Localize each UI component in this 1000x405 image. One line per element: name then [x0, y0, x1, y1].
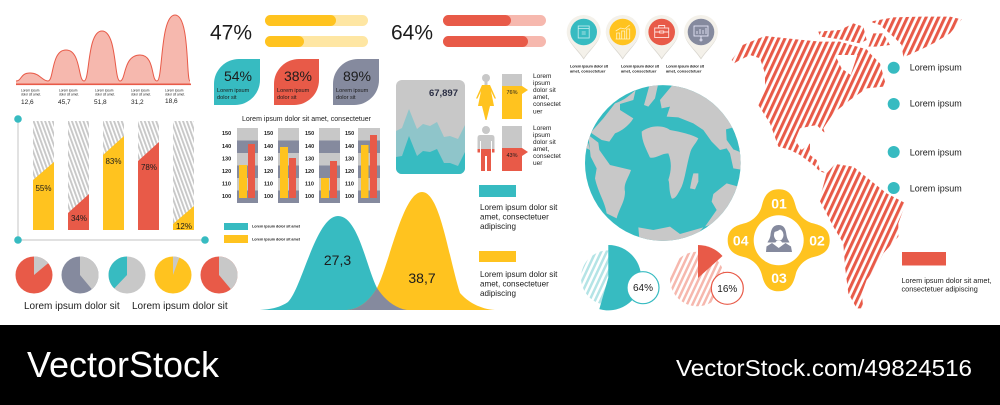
- area chart: Lorem ipsum: [95, 88, 114, 92]
- area chart: 31,2: [131, 99, 144, 106]
- bell legend yellow: adipiscing: [480, 289, 516, 298]
- grouped striped bar charts: 150: [345, 131, 354, 137]
- grouped striped bar charts: 130: [305, 156, 314, 162]
- gauge text lower: uer: [533, 160, 543, 167]
- map legend list: Lorem ipsum: [910, 98, 962, 108]
- black footer band: VectorStock: [27, 344, 220, 385]
- pin captions: Lorem ipsum dolor sit: [570, 64, 609, 68]
- grouped striped bar charts: 120: [222, 169, 231, 175]
- slate leaf stat: [333, 59, 379, 105]
- red gauge 43%: [502, 126, 528, 171]
- gauge text lower: [533, 125, 561, 167]
- gauge text lower: amet,: [533, 146, 549, 153]
- pie caption right: Lorem ipsum dolor sit: [132, 301, 228, 312]
- grouped striped bar charts: 110: [305, 182, 314, 188]
- bell legend teal: [479, 185, 558, 231]
- map legend list: Lorem ipsum: [910, 184, 962, 194]
- map note with red swatch: consectetuer adipiscing: [902, 284, 978, 294]
- black footer band: VectorStock.com/49824516: [676, 355, 972, 381]
- grouped striped bar charts: 120: [345, 169, 354, 175]
- grouped striped bar charts: 100: [222, 194, 231, 200]
- area chart: dolor sit amet.: [131, 92, 151, 96]
- gauge text upper: [533, 73, 561, 116]
- grouped striped bar charts: 100: [345, 194, 354, 200]
- area chart: 45,7: [58, 99, 71, 106]
- grouped striped bar charts: 120: [305, 169, 314, 175]
- icon: businesswoman: [766, 225, 792, 252]
- grouped striped bar charts: [222, 128, 380, 203]
- yellow gauge 76%: 76%: [506, 90, 518, 96]
- four-lobed step diagram: 04: [733, 232, 749, 248]
- red progress stat: 64%: [391, 22, 433, 44]
- map note with red swatch: Lorem ipsum dolor sit amet,: [902, 276, 992, 285]
- teal leaf stat: 54%: [224, 68, 252, 84]
- grouped striped bar charts: 130: [264, 156, 273, 162]
- area chart: dolor sit amet.: [95, 92, 115, 96]
- bell legend teal: adipiscing: [480, 222, 516, 231]
- bell legend yellow: [479, 251, 558, 298]
- gauge text upper: ipsum: [533, 80, 550, 87]
- four-lobed step diagram: 02: [809, 232, 825, 248]
- red gauge 43%: 43%: [506, 153, 518, 159]
- gauge text lower: consectet: [533, 153, 561, 160]
- map legend list: Lorem ipsum: [910, 148, 962, 158]
- hatched percentage bar chart: 34%: [71, 214, 87, 223]
- grouped striped bar charts: 140: [264, 144, 273, 150]
- globe: [585, 85, 741, 241]
- slate leaf stat: Lorem ipsum: [336, 88, 369, 94]
- grouped striped bar charts: 130: [222, 156, 231, 162]
- hatched percentage bar chart: 12%: [176, 222, 192, 231]
- teal pie with 64% badge: [581, 245, 659, 310]
- area chart: dolor sit amet.: [59, 92, 79, 96]
- hatched percentage bar chart: [14, 115, 209, 244]
- grouped striped bar charts: 110: [264, 182, 273, 188]
- pin captions: amet, consectetuer: [666, 68, 702, 74]
- grouped striped bar charts: 100: [264, 194, 273, 200]
- grouped striped bar charts: 140: [305, 144, 314, 150]
- bell legend yellow: Lorem ipsum dolor sit: [480, 270, 558, 279]
- grouped striped bar charts: 150: [305, 131, 314, 137]
- grouped striped bar charts: 110: [345, 182, 354, 188]
- map legend list: Lorem ipsum: [910, 62, 962, 72]
- area chart: 18,6: [165, 98, 178, 105]
- bar chart legend: [224, 223, 301, 243]
- grouped striped bar charts: 130: [345, 156, 354, 162]
- area chart: Lorem ipsum: [131, 88, 150, 92]
- black footer band: [0, 325, 1000, 405]
- area chart: Lorem ipsum: [21, 88, 40, 92]
- small bar charts heading: Lorem ipsum dolor sit amet, consectetuer: [242, 116, 372, 123]
- area chart: dolor sit amet.: [21, 92, 41, 96]
- grouped striped bar charts: 110: [222, 182, 231, 188]
- four-lobed step diagram: 03: [771, 270, 787, 286]
- red pie with 16% badge: 16%: [717, 284, 737, 295]
- yellow gauge 76%: [502, 74, 528, 119]
- map note with red swatch: [902, 252, 992, 294]
- grouped striped bar charts: 150: [222, 131, 231, 137]
- gauge text upper: amet,: [533, 94, 549, 101]
- stat card with area chart: [396, 80, 465, 174]
- hatched percentage bar chart: 78%: [141, 163, 157, 172]
- hatched percentage bar chart: 83%: [105, 157, 122, 166]
- pin captions: [570, 64, 705, 74]
- gauge text upper: dolor sit: [533, 87, 556, 94]
- bell legend teal: amet, consectetuer: [480, 212, 549, 222]
- pin icon: briefcase: [645, 15, 679, 60]
- stat card with area chart: 67,897: [429, 88, 458, 99]
- area chart: dolor sit amet.: [165, 92, 185, 96]
- four-lobed step diagram: [728, 189, 830, 291]
- grouped striped bar charts: 120: [264, 169, 273, 175]
- red leaf stat: [274, 59, 319, 105]
- slate leaf stat: 89%: [343, 68, 371, 84]
- gauge text lower: ipsum: [533, 132, 550, 139]
- gauge text upper: uer: [533, 108, 543, 116]
- red pie with 16% badge: [670, 245, 743, 306]
- area chart: Lorem ipsum: [59, 88, 78, 92]
- bar chart legend: Lorem ipsum dolor sit amet: [252, 224, 301, 228]
- red leaf stat: Lorem ipsum: [277, 88, 310, 94]
- hatched map of the Americas: [732, 17, 962, 308]
- pin icon: chart: [606, 15, 640, 60]
- red leaf stat: 38%: [284, 68, 312, 84]
- four-lobed step diagram: 01: [771, 196, 787, 212]
- area chart: [16, 15, 191, 106]
- grouped striped bar charts: 140: [345, 144, 354, 150]
- yellow progress stat: 47%: [210, 22, 252, 44]
- pin icon: presentation board: [684, 15, 718, 60]
- row of pie charts: [16, 256, 238, 294]
- bell legend teal: Lorem ipsum dolor sit: [480, 203, 558, 212]
- pin captions: amet, consectetuer: [621, 68, 657, 74]
- gauge text upper: Lorem: [533, 73, 551, 80]
- teal leaf stat: [214, 59, 260, 105]
- teal pie with 64% badge: 64%: [633, 283, 653, 294]
- teal leaf stat: Lorem ipsum: [217, 88, 250, 94]
- area chart: Lorem ipsum: [165, 88, 184, 92]
- area chart: 51,8: [94, 99, 107, 106]
- yellow progress stat: [210, 15, 368, 47]
- grouped striped bar charts: 150: [264, 131, 273, 137]
- icon: woman: [476, 74, 496, 120]
- red progress stat: [391, 15, 546, 47]
- pin captions: amet, consectetuer: [570, 68, 606, 74]
- hatched percentage bar chart: 55%: [35, 184, 52, 193]
- bar chart legend: Lorem ipsum dolor sit amet: [252, 238, 301, 242]
- pie caption left: Lorem ipsum dolor sit: [24, 301, 120, 312]
- area chart: 12,6: [21, 99, 34, 106]
- slate leaf stat: dolor sit: [336, 95, 356, 101]
- pin icon: document: [567, 15, 601, 60]
- gauge text lower: dolor sit: [533, 139, 556, 146]
- teal leaf stat: dolor sit: [217, 95, 237, 101]
- red leaf stat: dolor sit: [277, 95, 297, 101]
- map legend list: [888, 62, 962, 194]
- pin captions: Lorem ipsum dolor sit: [666, 64, 705, 68]
- bell curve chart: 38,7: [408, 270, 436, 286]
- grouped striped bar charts: 100: [305, 194, 314, 200]
- bell curve chart: [260, 192, 495, 310]
- icon: man: [478, 126, 494, 171]
- gauge text upper: consectet: [533, 101, 561, 108]
- bell legend yellow: amet, consectetuer: [480, 280, 549, 288]
- pin captions: Lorem ipsum dolor sit: [621, 64, 660, 68]
- gauge text lower: Lorem: [533, 125, 551, 132]
- bell curve chart: 27,3: [324, 252, 351, 268]
- grouped striped bar charts: 140: [222, 144, 231, 150]
